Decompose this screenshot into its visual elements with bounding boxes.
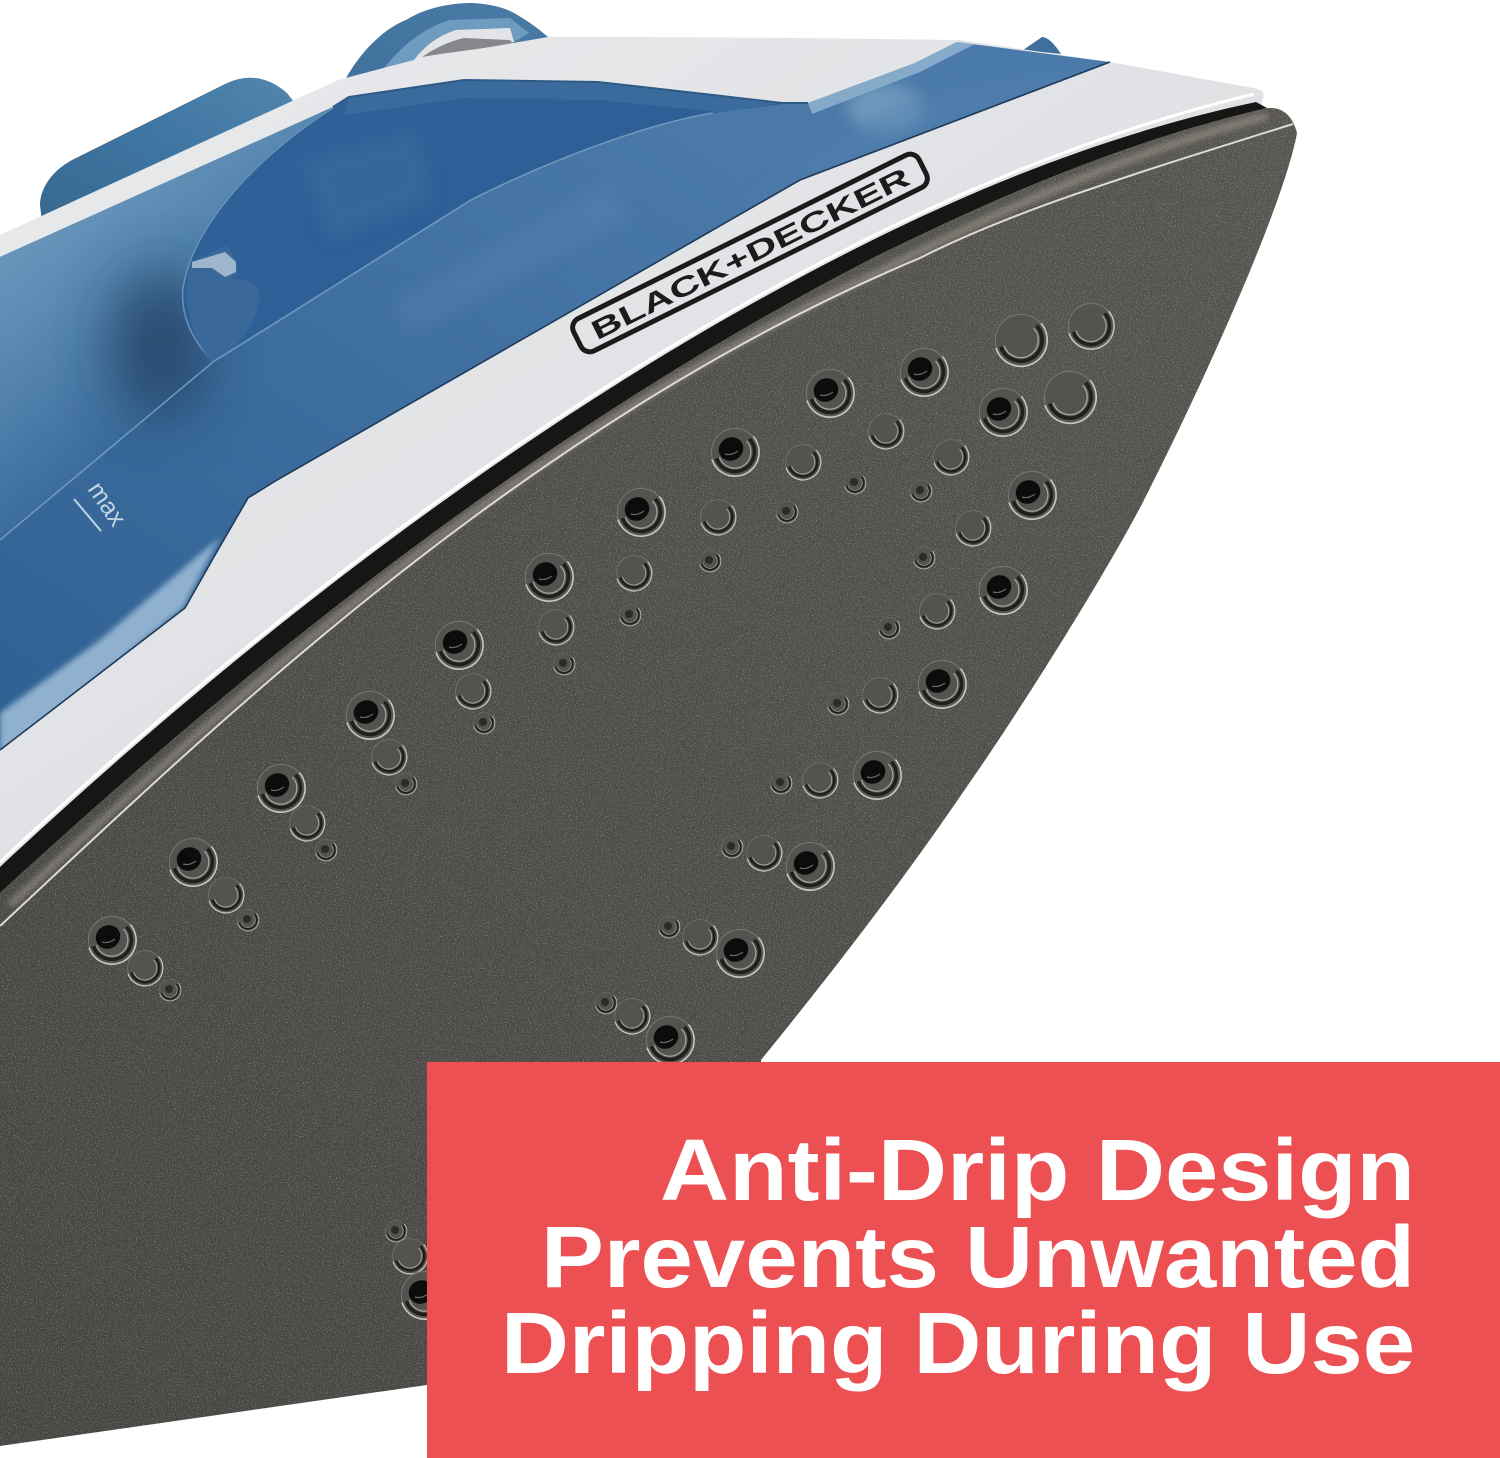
shell edge highlight (0, 94, 1254, 862)
icon: rear blue button (40, 78, 300, 222)
callout: red banner (427, 1062, 1500, 1458)
blue top shelf (400, 42, 1110, 320)
pale blue edge strip (0, 537, 220, 760)
callout heading: Anti-Drip Design (660, 1122, 1415, 1219)
panel: blue lower body (0, 42, 1110, 750)
callout heading: Prevents Unwanted (541, 1209, 1415, 1306)
panel: clear tank window (182, 81, 781, 362)
logo: brand badge: BLACK+DECKER (586, 162, 915, 346)
shell to tank seam (0, 62, 1110, 750)
tank top seam (333, 80, 808, 107)
steam vents (88, 303, 1114, 1319)
icon: small rear knob (1023, 37, 1061, 54)
panel: dark gap under shell (0, 102, 1267, 893)
callout heading: Dripping During Use (501, 1295, 1415, 1392)
panel: frosted water tank side (0, 107, 333, 540)
panel: soleplate (0, 108, 1297, 1446)
callout heading (501, 1122, 1415, 1392)
logo: brand badge (569, 151, 931, 355)
panel: white shell (0, 37, 1264, 867)
tank divider line (0, 113, 713, 540)
label: max fill line: max (82, 477, 132, 532)
icon: front steam dial (341, 3, 548, 105)
soleplate white edge line (0, 124, 1293, 926)
